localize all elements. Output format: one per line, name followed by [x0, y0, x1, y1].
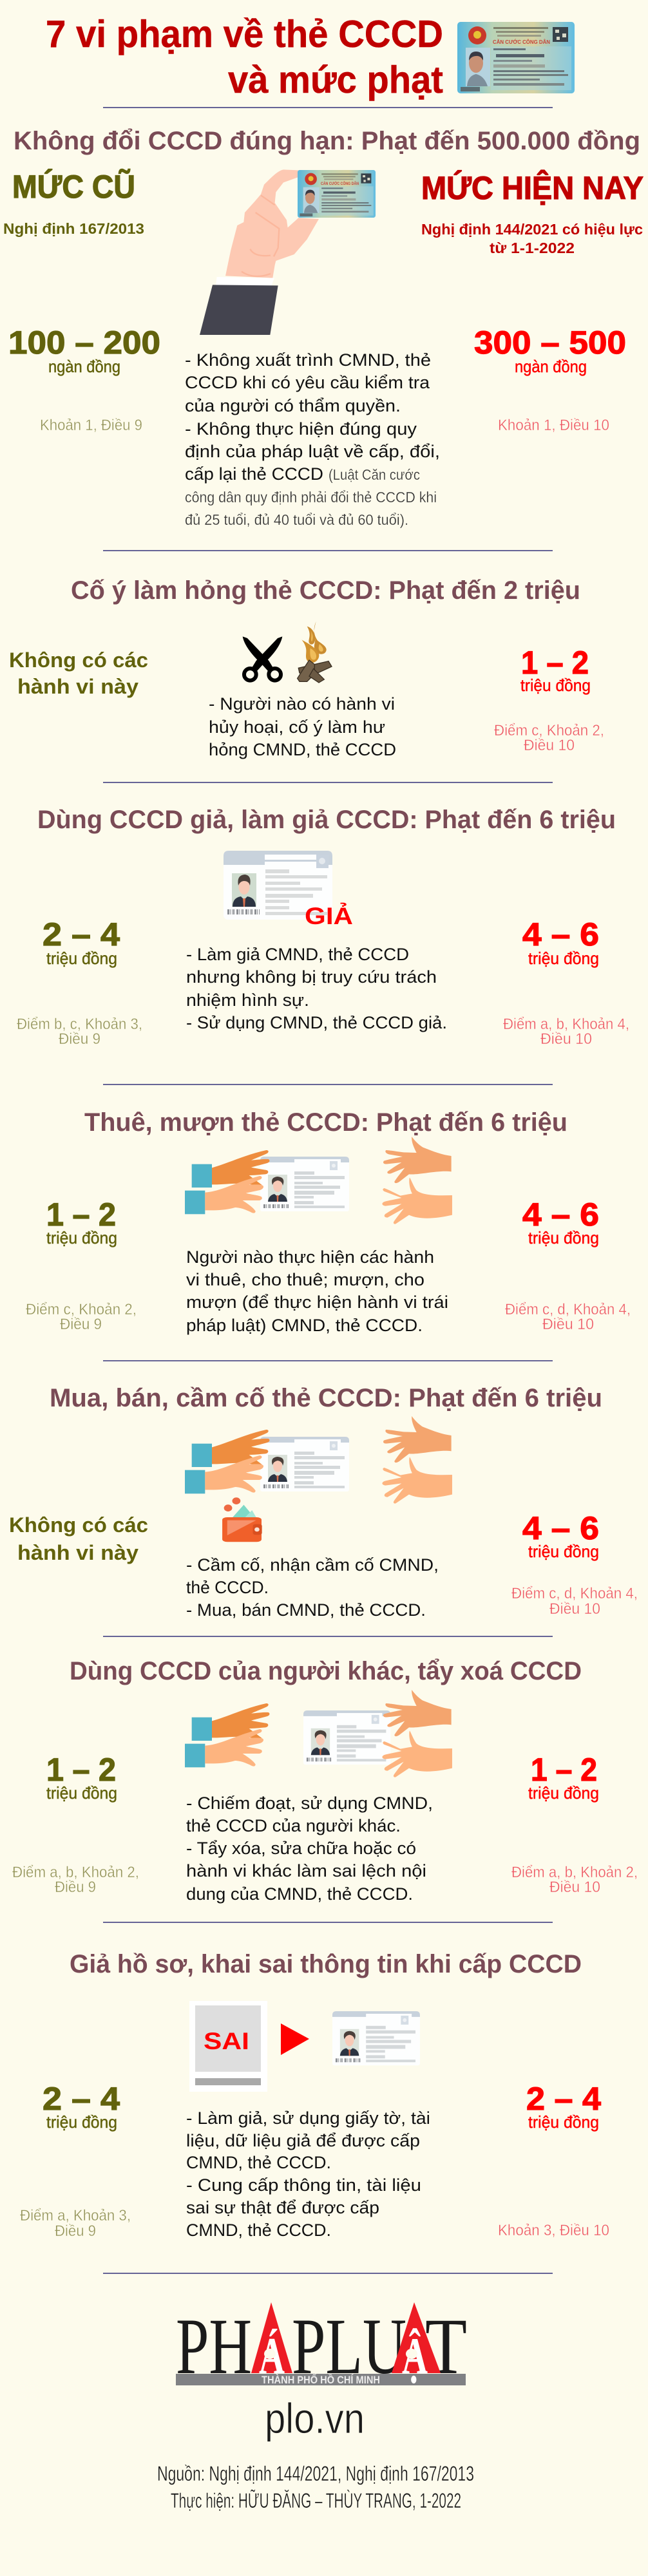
violation description: sai sự thật để được cấp	[186, 2198, 379, 2217]
old fine	[8, 325, 160, 434]
icon: false document	[189, 2001, 267, 2092]
old fine	[17, 916, 142, 1048]
source and credits	[157, 2462, 474, 2512]
old level: none: Không có các	[9, 649, 148, 672]
violation description: - Tẩy xóa, sửa chữa hoặc có	[186, 1839, 416, 1858]
current fine	[511, 1510, 638, 1618]
violation description: CMND, thẻ CCCD.	[186, 2153, 331, 2172]
violation description	[186, 945, 447, 1032]
current fine: Điều 10	[549, 1600, 600, 1618]
old fine: Điểm a, b, Khoản 2,	[12, 1864, 139, 1881]
title	[46, 13, 443, 101]
current fine: triệu đồng	[520, 676, 591, 695]
current fine: 1 – 2	[521, 645, 589, 681]
old fine: Điều 9	[60, 1316, 102, 1333]
old fine: 2 – 4	[43, 916, 120, 952]
violation description	[186, 1794, 433, 1904]
current fine	[494, 645, 604, 754]
heading: Dùng CCCD của người khác, tẩy xoá CCCD	[70, 1657, 582, 1685]
violation description: - Làm giả CMND, thẻ CCCD	[186, 945, 409, 964]
violation description: - Chiếm đoạt, sử dụng CMND,	[186, 1794, 433, 1813]
icon: citizen ID card	[457, 22, 575, 93]
violation description	[186, 1555, 439, 1620]
violation description: - Sử dụng CMND, thẻ CCCD giả.	[186, 1013, 447, 1032]
heading: Cố ý làm hỏng thẻ CCCD: Phạt đến 2 triệu	[71, 576, 580, 605]
old fine	[26, 1197, 137, 1333]
source and credits: Thực hiện: HỮU ĐĂNG – THÙY TRANG, 1-2022	[171, 2489, 461, 2512]
icon: wallet with money	[222, 1497, 262, 1542]
old fine: triệu đồng	[46, 1783, 117, 1803]
current fine	[503, 916, 629, 1048]
old fine: Điểm b, c, Khoản 3,	[17, 1016, 142, 1033]
current fine: Điều 10	[549, 1879, 600, 1896]
old fine	[12, 1752, 139, 1896]
icon: hands exchanging card	[185, 1416, 452, 1504]
title: và mức phạt	[228, 59, 443, 101]
panel: using another's card, erasing	[12, 1657, 638, 1904]
violation description: liệu, dữ liệu giả để được cấp	[186, 2131, 420, 2150]
icon: citizen ID card: CĂN CƯỚC CÔNG DÂN	[493, 39, 550, 45]
old level: none	[9, 1513, 148, 1564]
icon: hands exchanging card	[185, 1137, 452, 1224]
current fine: Khoản 1, Điều 10	[498, 417, 609, 434]
violation description: Người nào thực hiện các hành	[186, 1247, 434, 1267]
old fine: triệu đồng	[46, 949, 117, 968]
violation description: pháp luật) CMND, thẻ CCCD.	[186, 1316, 423, 1335]
current fine: Điểm c, Khoản 2,	[494, 722, 604, 739]
violation description	[186, 2108, 430, 2240]
icon: hand holding ID card: CĂN CƯỚC CÔNG DÂN	[321, 181, 359, 186]
current fine: 300 – 500	[474, 325, 626, 361]
violation description	[185, 350, 440, 528]
current fine: Điều 10	[540, 1030, 592, 1048]
current fine: triệu đồng	[528, 1228, 599, 1247]
violation description: đủ 25 tuổi, đủ 40 tuổi và đủ 60 tuổi).	[185, 511, 408, 528]
logo: Pháp Luật: Ậ	[402, 2328, 428, 2385]
current fine: 4 – 6	[522, 916, 599, 952]
violation description: dung của CMND, thẻ CCCD.	[186, 1884, 413, 1904]
violation description: nhưng không bị truy cứu trách	[186, 967, 437, 987]
logo: Pháp Luật: Á	[259, 2328, 285, 2385]
old fine: 100 – 200	[8, 325, 160, 361]
current fine: Điểm a, b, Khoản 4,	[503, 1016, 629, 1033]
violation description: vi thuê, cho thuê; mượn, cho	[186, 1270, 424, 1289]
violation description: - Làm giả, sử dụng giấy tờ, tài	[186, 2108, 430, 2128]
icon: hands passing card	[185, 1690, 452, 1777]
title: 7 vi phạm về thẻ CCCD	[46, 13, 443, 55]
violation description: - Không xuất trình CMND, thẻ	[185, 350, 431, 370]
violation description: cấp lại thẻ CCCD	[185, 464, 323, 484]
panel: fake card	[17, 806, 629, 1048]
old level: none: Không có các	[9, 1513, 148, 1537]
violation description: (Luật Căn cước	[329, 466, 420, 483]
violation description: - Không thực hiện đúng quy	[185, 419, 417, 439]
heading: Không đổi CCCD đúng hạn: Phạt đến 500.000 đồng	[14, 127, 640, 155]
current fine: Điểm c, d, Khoản 4,	[511, 1585, 638, 1602]
old fine: Điểm a, Khoản 3,	[20, 2207, 131, 2224]
current fine	[474, 325, 626, 434]
panel: late card renewal	[3, 127, 643, 528]
current fine: 1 – 2	[531, 1752, 597, 1788]
old fine: 2 – 4	[43, 2081, 120, 2117]
old fine: 1 – 2	[46, 1752, 116, 1788]
violation description: CMND, thẻ CCCD.	[186, 2221, 331, 2240]
old fine: Điều 9	[59, 1030, 100, 1048]
source and credits: Nguồn: Nghị định 144/2021, Nghị định 167/2013	[157, 2462, 474, 2485]
violation description: - Cung cấp thông tin, tài liệu	[186, 2175, 421, 2195]
current fine: ngàn đồng	[515, 357, 587, 376]
violation description: hủy hoại, cố ý làm hư	[209, 717, 385, 737]
old level column header: Nghị định 167/2013	[3, 220, 144, 237]
violation description: của người có thẩm quyền.	[185, 396, 401, 415]
current fine: Khoản 3, Điều 10	[498, 2222, 609, 2239]
violation description: định của pháp luật về cấp, đổi,	[185, 442, 440, 461]
icon: false document: SAI	[204, 2028, 249, 2054]
panel: rent or borrow	[26, 1108, 631, 1335]
old fine: Điểm c, Khoản 2,	[26, 1301, 137, 1318]
old level column header	[3, 168, 144, 237]
logo: Pháp Luật	[176, 2302, 467, 2391]
current fine: triệu đồng	[528, 1783, 599, 1803]
current fine: triệu đồng	[528, 1542, 599, 1561]
heading: Giả hồ sơ, khai sai thông tin khi cấp CCCD	[70, 1950, 582, 1978]
current level column header	[421, 170, 643, 256]
violation description: hành vi khác làm sai lệch nội	[186, 1861, 426, 1880]
current fine: Điểm c, d, Khoản 4,	[505, 1301, 631, 1318]
old level: none: hành vi này	[17, 1541, 138, 1564]
heading: Dùng CCCD giả, làm giả CCCD: Phạt đến 6 triệu	[37, 806, 616, 834]
old level: none	[9, 649, 148, 698]
icon: hand holding ID card	[200, 169, 376, 335]
panel: buy, sell, pawn	[9, 1384, 638, 1620]
old fine: triệu đồng	[46, 2112, 117, 2132]
violation description: công dân quy định phải đổi thẻ CCCD khi	[185, 489, 437, 506]
current fine: Điều 10	[524, 737, 575, 754]
icon: scissors	[243, 636, 282, 681]
violation description: thẻ CCCD của người khác.	[186, 1816, 401, 1835]
current fine: triệu đồng	[528, 949, 599, 968]
old fine: 1 – 2	[46, 1197, 116, 1233]
arrow	[281, 2023, 309, 2055]
logo: Pháp Luật: PH	[176, 2302, 252, 2391]
violation description: mượn (để thực hiện hành vi trái	[186, 1293, 448, 1312]
current fine	[505, 1197, 631, 1333]
logo: Pháp Luật: THÀNH PHỐ HỒ CHÍ MINH	[262, 2373, 380, 2386]
old fine: ngàn đồng	[48, 357, 120, 376]
current fine: 4 – 6	[522, 1197, 599, 1233]
icon: ID card	[332, 2011, 420, 2065]
old fine	[20, 2081, 131, 2240]
violation description	[209, 694, 396, 759]
violation description	[186, 1247, 448, 1335]
current fine	[498, 2081, 609, 2239]
old fine: Khoản 1, Điều 9	[40, 417, 142, 434]
current level column header: từ 1-1-2022	[490, 240, 575, 256]
heading: Mua, bán, cầm cố thẻ CCCD: Phạt đến 6 triệu	[50, 1384, 602, 1412]
icon: fake ID card	[224, 851, 353, 929]
violation description: thẻ CCCD.	[186, 1578, 269, 1597]
violation description: - Cầm cố, nhận cầm cố CMND,	[186, 1555, 439, 1575]
old fine: Điều 9	[55, 1879, 96, 1896]
old level column header: MỨC CŨ	[12, 168, 135, 205]
violation description: hỏng CMND, thẻ CCCD	[209, 740, 396, 759]
violation description: CCCD khi có yêu cầu kiểm tra	[185, 373, 430, 392]
current fine: 4 – 6	[522, 1510, 599, 1546]
violation description: - Người nào có hành vi	[209, 694, 395, 714]
old fine: triệu đồng	[46, 1228, 117, 1247]
violation description: nhiệm hình sự.	[186, 990, 309, 1010]
current fine: 2 – 4	[526, 2081, 601, 2117]
logo: Pháp Luật: T	[425, 2302, 467, 2391]
violation description: - Mua, bán CMND, thẻ CCCD.	[186, 1600, 426, 1620]
heading: Thuê, mượn thẻ CCCD: Phạt đến 6 triệu	[84, 1108, 567, 1137]
current fine: Điều 10	[542, 1316, 594, 1333]
current fine: triệu đồng	[528, 2112, 599, 2132]
icon: fake ID card: GIẢ	[305, 903, 353, 929]
current fine: Điểm a, b, Khoản 2,	[511, 1864, 638, 1881]
old level: none: hành vi này	[17, 675, 138, 698]
panel: false documents	[20, 1950, 609, 2240]
old fine: Điều 9	[55, 2222, 96, 2240]
panel: deliberate damage	[9, 576, 604, 759]
current level column header: Nghị định 144/2021 có hiệu lực	[421, 221, 643, 238]
icon: burning fire	[298, 621, 332, 683]
current fine	[511, 1752, 638, 1896]
website: plo.vn	[265, 2394, 365, 2442]
logo: Pháp Luật: PLU	[292, 2302, 406, 2391]
